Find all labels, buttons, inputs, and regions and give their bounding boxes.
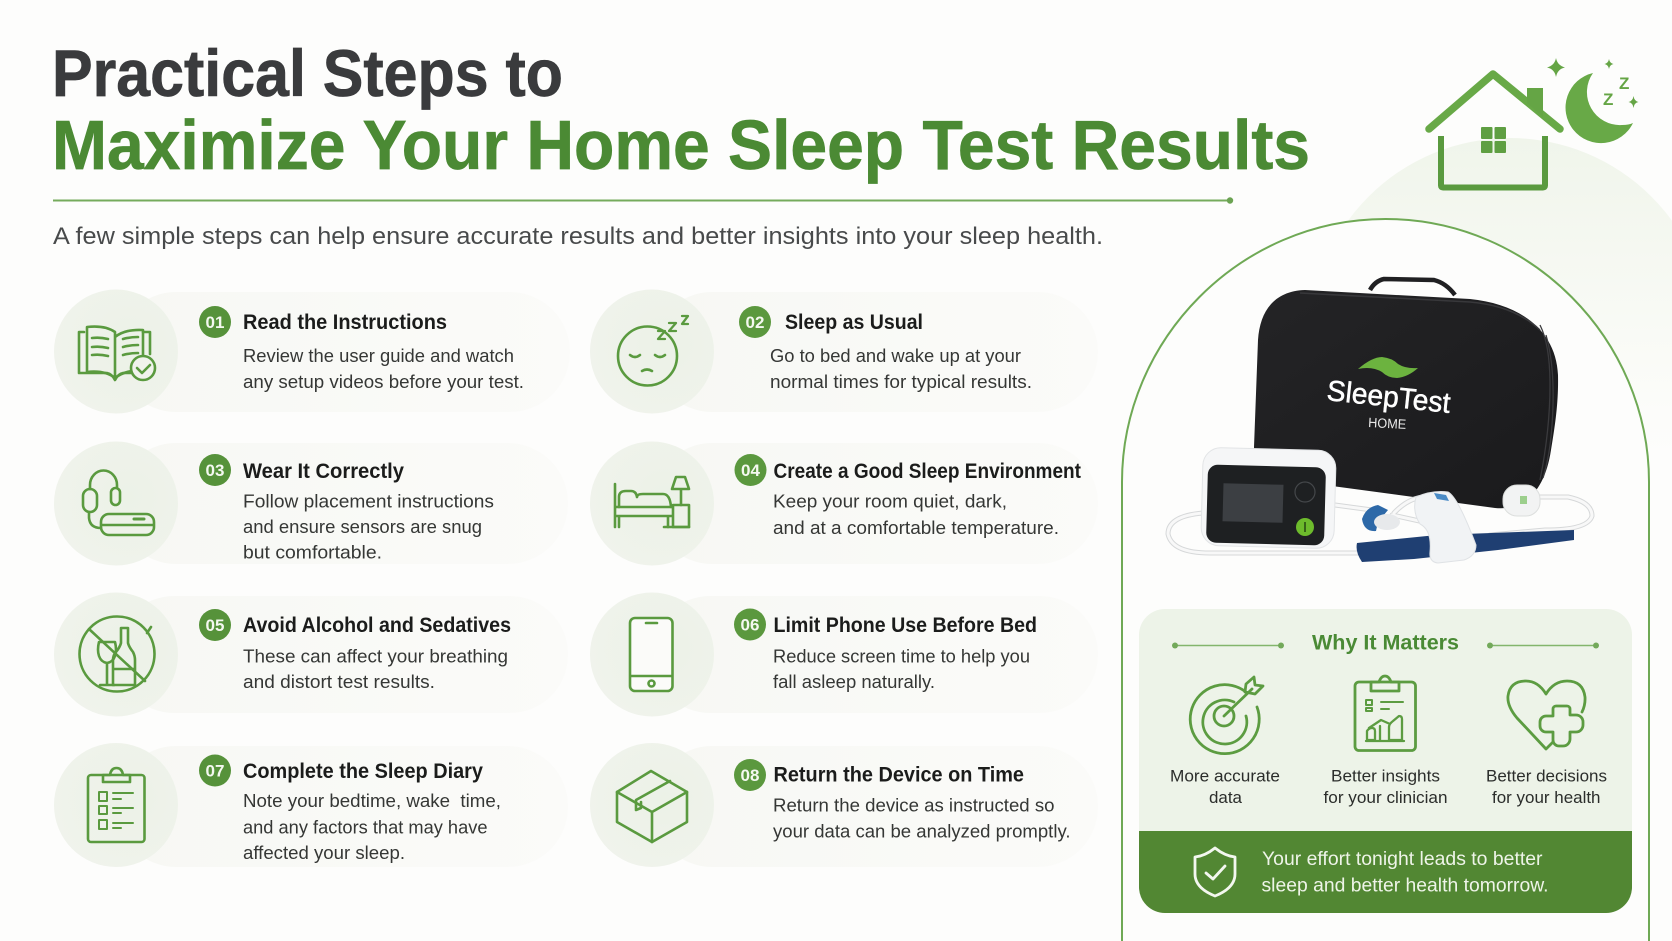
label: better decisions: Better decisions <box>1486 768 1607 786</box>
heading 05: Avoid Alcohol and Sedatives <box>243 614 511 637</box>
text 01 <box>243 345 524 392</box>
product: chest sensor <box>1503 485 1540 516</box>
text 06 <box>773 646 1030 692</box>
text 05: and distort test results. <box>243 671 435 692</box>
panel: step 02 <box>590 290 1098 414</box>
handle <box>1370 279 1455 295</box>
sleep letter small: Z <box>1603 90 1613 109</box>
subtitle: A few simple steps can help ensure accurate results and better insights into your sleep health. <box>53 223 1103 250</box>
panel: step 07 <box>54 743 568 867</box>
label: more accurate data <box>1170 768 1280 807</box>
text 03: but comfortable. <box>243 542 382 562</box>
badge 01: 01 <box>206 313 224 332</box>
badge 07: 07 <box>206 762 224 780</box>
icon: phone <box>630 618 672 691</box>
text 05 <box>243 646 508 692</box>
heading 07: Complete the Sleep Diary <box>243 760 483 783</box>
badge 07 <box>199 754 231 786</box>
product: recorder device <box>1201 447 1336 549</box>
callout text <box>1262 848 1548 896</box>
badge 01 <box>199 306 231 338</box>
badge 03: 03 <box>206 461 224 480</box>
heading 06: Limit Phone Use Before Bed <box>774 614 1037 637</box>
badge 03 <box>199 454 231 486</box>
icon: open book with check <box>79 327 155 380</box>
heading 01: Read the Instructions <box>243 311 447 334</box>
text 02 <box>770 345 1032 392</box>
text 03: and ensure sensors are snug <box>243 516 482 537</box>
badge 04: 04 <box>741 461 760 480</box>
icon: shield check <box>1195 848 1235 896</box>
badge 04 <box>734 454 766 486</box>
icon: bed and lamp <box>615 477 689 527</box>
label: better decisions: for your health <box>1492 789 1600 807</box>
text 07: affected your sleep. <box>243 842 405 863</box>
panel: step 06 <box>590 592 1098 716</box>
heading rule left <box>1172 642 1284 648</box>
label: more accurate data: data <box>1209 789 1243 807</box>
heading: Why It Matters <box>1312 630 1459 654</box>
product: strap <box>1357 530 1574 562</box>
text 05: These can affect your breathing <box>243 646 508 666</box>
heading 04: Create a Good Sleep Environment <box>774 460 1081 483</box>
callout band <box>1139 831 1632 913</box>
product: cables <box>1168 497 1592 553</box>
badge 02: 02 <box>746 313 764 332</box>
text 07: Note your bedtime, wake time, <box>243 790 501 811</box>
text 04: and at a comfortable temperature. <box>773 517 1059 538</box>
heading 03: Wear It Correctly <box>243 460 404 483</box>
text 01: any setup videos before your test. <box>243 371 524 392</box>
product: carrying case: HOME <box>1368 415 1407 432</box>
label: more accurate data: More accurate <box>1170 768 1280 786</box>
badge 06: 06 <box>741 616 759 634</box>
icon: no alcohol <box>80 616 154 692</box>
icon: heart with plus <box>1508 681 1585 749</box>
text 07 <box>243 790 501 863</box>
sleep letter large: Z <box>1619 74 1629 93</box>
text 04: Keep your room quiet, dark, <box>773 490 1007 512</box>
title: Practical Steps to <box>52 36 563 110</box>
panel: why it matters <box>1139 609 1632 913</box>
icon: sleeping face <box>618 316 688 386</box>
text 03: Follow placement instructions <box>243 490 494 512</box>
badge 05: 05 <box>206 616 224 635</box>
badge 02 <box>739 306 771 338</box>
text 07: and any factors that may have <box>243 816 488 838</box>
panel: step 01 <box>54 290 570 414</box>
badge 08 <box>734 759 766 791</box>
heading 08: Return the Device on Time <box>774 764 1024 786</box>
label: better decisions <box>1486 768 1607 807</box>
text 02: normal times for typical results. <box>770 371 1032 392</box>
text 08: your data can be analyzed promptly. <box>773 820 1070 842</box>
logo wordmark: SleepTest <box>1325 375 1452 420</box>
text 06: fall asleep naturally. <box>773 671 935 692</box>
badge 06 <box>734 608 766 640</box>
icon: house with moon <box>1429 58 1638 188</box>
heading rule right <box>1487 642 1599 648</box>
icon: headset sensor and box <box>83 470 154 535</box>
callout text: Your effort tonight leads to better <box>1262 848 1543 870</box>
text 02: Go to bed and wake up at your <box>770 345 1021 366</box>
heading 02: Sleep as Usual <box>785 311 923 334</box>
text 01: Review the user guide and watch <box>243 345 514 366</box>
product: finger sensor <box>1362 505 1388 531</box>
logo leaf <box>1358 357 1418 378</box>
panel: step 04 <box>590 442 1098 566</box>
icon: clipboard chart <box>1355 676 1416 750</box>
arch frame <box>1122 219 1649 941</box>
text 06: Reduce screen time to help you <box>773 646 1030 666</box>
label: better insights: Better insights <box>1331 768 1440 786</box>
panel: step 03 <box>54 442 568 566</box>
product: carrying case <box>1254 279 1558 508</box>
text 08 <box>773 794 1070 842</box>
label: better insights: for your clinician <box>1324 789 1448 807</box>
badge 08: 08 <box>741 766 759 785</box>
text 03 <box>243 490 494 562</box>
text 08: Return the device as instructed so <box>773 794 1054 816</box>
product: clip sensor <box>1415 492 1476 563</box>
icon: parcel box <box>617 771 687 842</box>
zipper seams <box>1540 325 1553 480</box>
title: Maximize Your Home Sleep Test Results <box>52 106 1310 184</box>
moon crescent <box>1566 73 1633 143</box>
panel: step 05 <box>54 592 568 716</box>
label: better insights <box>1324 768 1448 807</box>
icon: clipboard checklist <box>88 768 144 842</box>
title <box>52 36 1310 184</box>
text 04 <box>773 490 1059 538</box>
icon: target <box>1190 677 1263 754</box>
panel: step 08 <box>590 743 1098 867</box>
badge 05 <box>199 609 231 641</box>
sparkles <box>1547 58 1638 108</box>
callout text: sleep and better health tomorrow. <box>1262 874 1548 896</box>
